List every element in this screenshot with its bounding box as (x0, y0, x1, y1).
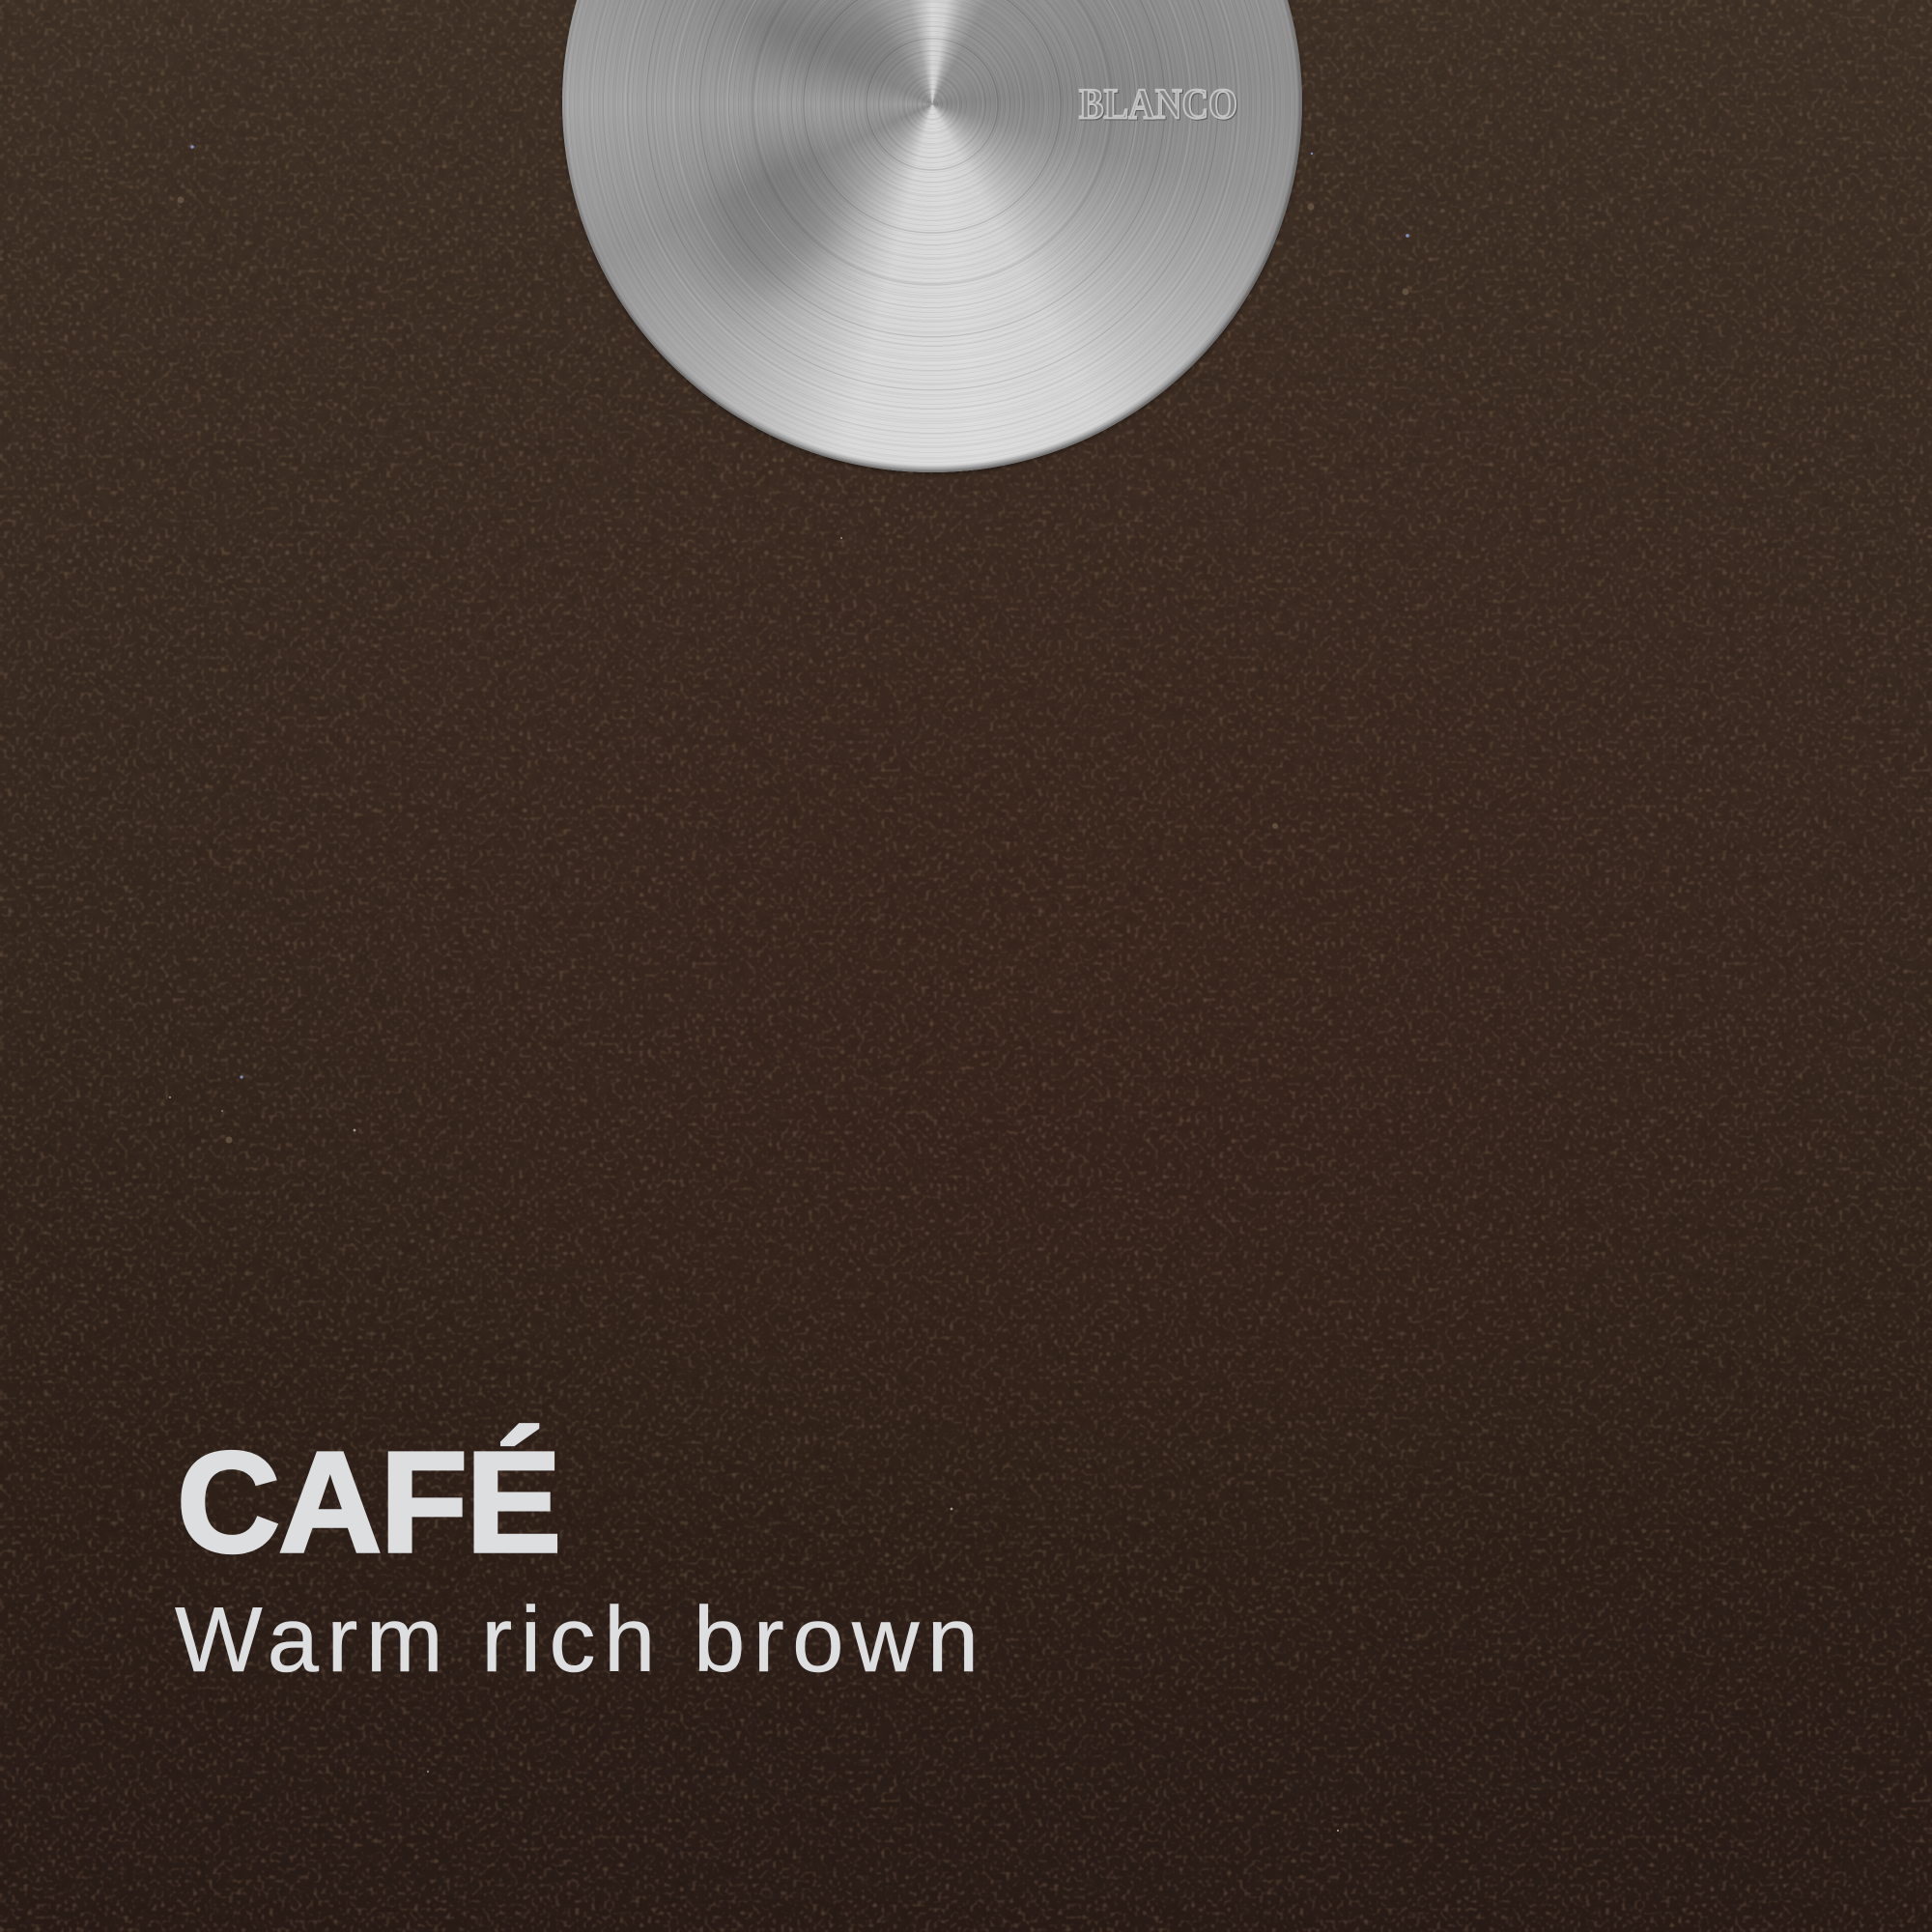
title: CAFÉ (177, 1423, 559, 1582)
brushed concentric rings (562, 0, 1302, 472)
disc rim bevel (562, 0, 1302, 472)
subtitle: Warm rich brown (175, 1588, 987, 1691)
disc shading and irregular brush lines (624, 0, 1240, 390)
steel disc (562, 0, 1302, 472)
